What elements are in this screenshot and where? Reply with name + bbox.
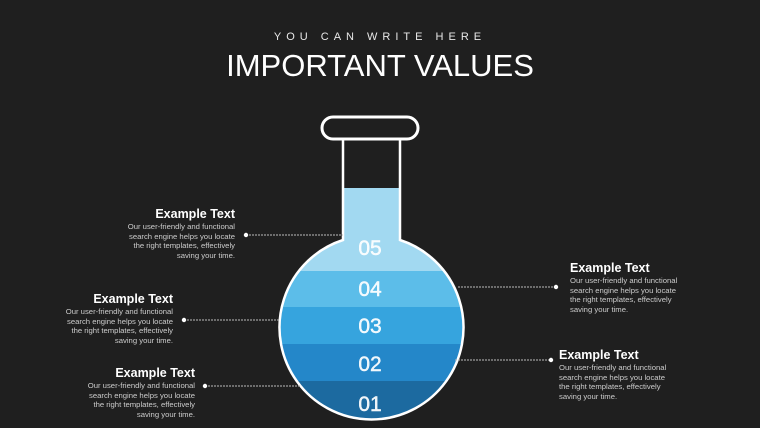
numbers: 02 <box>358 353 382 376</box>
text block: left 3 <box>88 366 196 419</box>
connector lines <box>184 235 556 386</box>
text block: right 1: Our user-friendly and functional <box>570 276 678 285</box>
flask cap <box>322 117 418 139</box>
text block: right 2: saving your time. <box>559 392 617 401</box>
text block: left 2: search engine helps you locate <box>67 317 173 326</box>
text block: left 1 <box>128 207 236 260</box>
text block: left 1: saving your time. <box>177 251 235 260</box>
text block: left 1: Example Text <box>155 207 236 221</box>
title: IMPORTANT VALUES <box>226 48 534 83</box>
text block: left 2: saving your time. <box>115 336 173 345</box>
text block: right 2: Our user-friendly and functional <box>559 363 667 372</box>
text block: left 1: Our user-friendly and functional <box>128 222 235 231</box>
text block: left 1: search engine helps you locate <box>129 232 235 241</box>
text block: right 1 <box>570 261 678 314</box>
text block: left 2 <box>66 292 174 345</box>
text block: left 3: Example Text <box>115 366 196 380</box>
text block: left 3: Our user-friendly and functional <box>88 381 195 390</box>
text block: right 2: the right templates, effectively <box>559 382 661 391</box>
subtitle: YOU CAN WRITE HERE <box>274 31 486 43</box>
text block: right 1: saving your time. <box>570 305 628 314</box>
flask <box>270 117 470 421</box>
text block: right 1: Example Text <box>570 261 651 275</box>
text block: right 1: the right templates, effectively <box>570 295 672 304</box>
liquid bands <box>280 188 462 418</box>
text block: right 1: search engine helps you locate <box>570 286 676 295</box>
text block: right 2 <box>559 348 667 401</box>
text block: left 3: saving your time. <box>137 410 195 419</box>
numbers <box>358 237 382 416</box>
text block: left 2: the right templates, effectively <box>71 326 173 335</box>
text block: left 3: search engine helps you locate <box>89 391 195 400</box>
text block: right 2: Example Text <box>559 348 640 362</box>
text block: right 2: search engine helps you locate <box>559 373 665 382</box>
numbers: 05 <box>358 237 382 260</box>
text block: left 2: Our user-friendly and functional <box>66 307 173 316</box>
numbers: 04 <box>358 278 382 301</box>
numbers: 03 <box>358 315 382 338</box>
flask outline <box>279 139 463 419</box>
text block: left 3: the right templates, effectively <box>93 400 195 409</box>
numbers: 01 <box>358 393 382 416</box>
text block: left 1: the right templates, effectively <box>133 241 235 250</box>
text block: left 2: Example Text <box>93 292 174 306</box>
